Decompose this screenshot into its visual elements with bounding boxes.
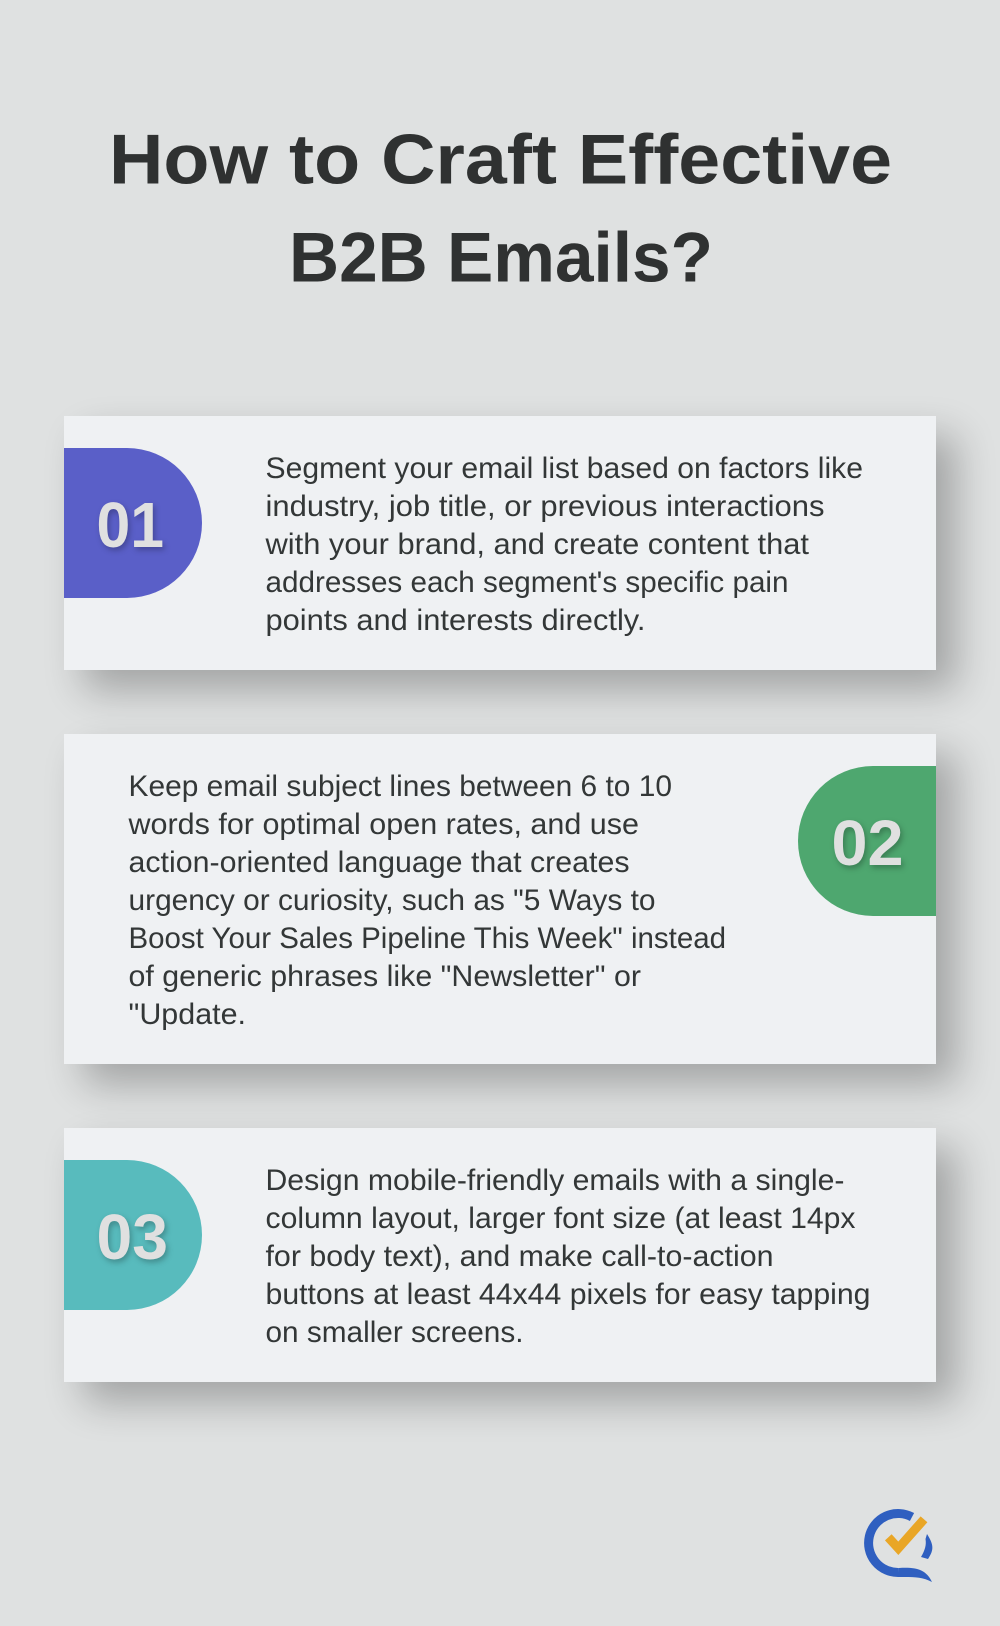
text: step 03: column layout, larger font size (at least 14px: [266, 1202, 856, 1235]
text: step 01: with your brand, and create content that: [264, 528, 809, 561]
badge: 03: [64, 1160, 202, 1310]
badge: 02: [798, 766, 936, 916]
text: step 03: [266, 1164, 870, 1349]
text: step 01: points and interests directly.: [266, 604, 646, 637]
text: step 02: words for optimal open rates, and use: [127, 808, 639, 841]
title: How to Craft Effective: [109, 120, 892, 198]
badge: 02: 02: [832, 807, 904, 879]
text: step 01: Segment your email list based on factors like: [266, 452, 863, 485]
panel: step 03: [64, 1128, 956, 1402]
badge: 01: 01: [96, 489, 164, 561]
badge: 01: [64, 448, 202, 598]
text: step 01: [264, 452, 863, 637]
text: step 03: buttons at least 44x44 pixels for easy tapping: [266, 1278, 870, 1311]
text: step 03: for body text), and make call-to-action: [266, 1240, 774, 1273]
text: step 01: addresses each segment's specific pain: [266, 566, 788, 599]
text: step 02: urgency or curiosity, such as "5 Ways to: [128, 884, 656, 917]
text: step 02: action-oriented language that creates: [128, 846, 630, 879]
badge: 03: 03: [96, 1201, 168, 1273]
text: step 02: Keep email subject lines between 6 to 10: [128, 770, 672, 803]
text: step 02: Boost Your Sales Pipeline This Week" instead: [128, 922, 726, 955]
text: step 01: industry, job title, or previous interactions: [266, 490, 824, 523]
panel: step 02: [64, 734, 956, 1084]
text: step 03: Design mobile-friendly emails with a single-: [266, 1164, 844, 1197]
text: step 03: on smaller screens.: [266, 1316, 524, 1349]
text: step 02: "Update.: [128, 998, 246, 1031]
text: step 02: of generic phrases like "Newsletter" or: [128, 960, 641, 993]
text: step 02: [127, 770, 726, 1031]
title: B2B Emails?: [289, 218, 713, 296]
title: [109, 120, 892, 296]
icon: logo chat bubble with check mark: [869, 1514, 932, 1582]
panel: step 01: [64, 416, 956, 690]
